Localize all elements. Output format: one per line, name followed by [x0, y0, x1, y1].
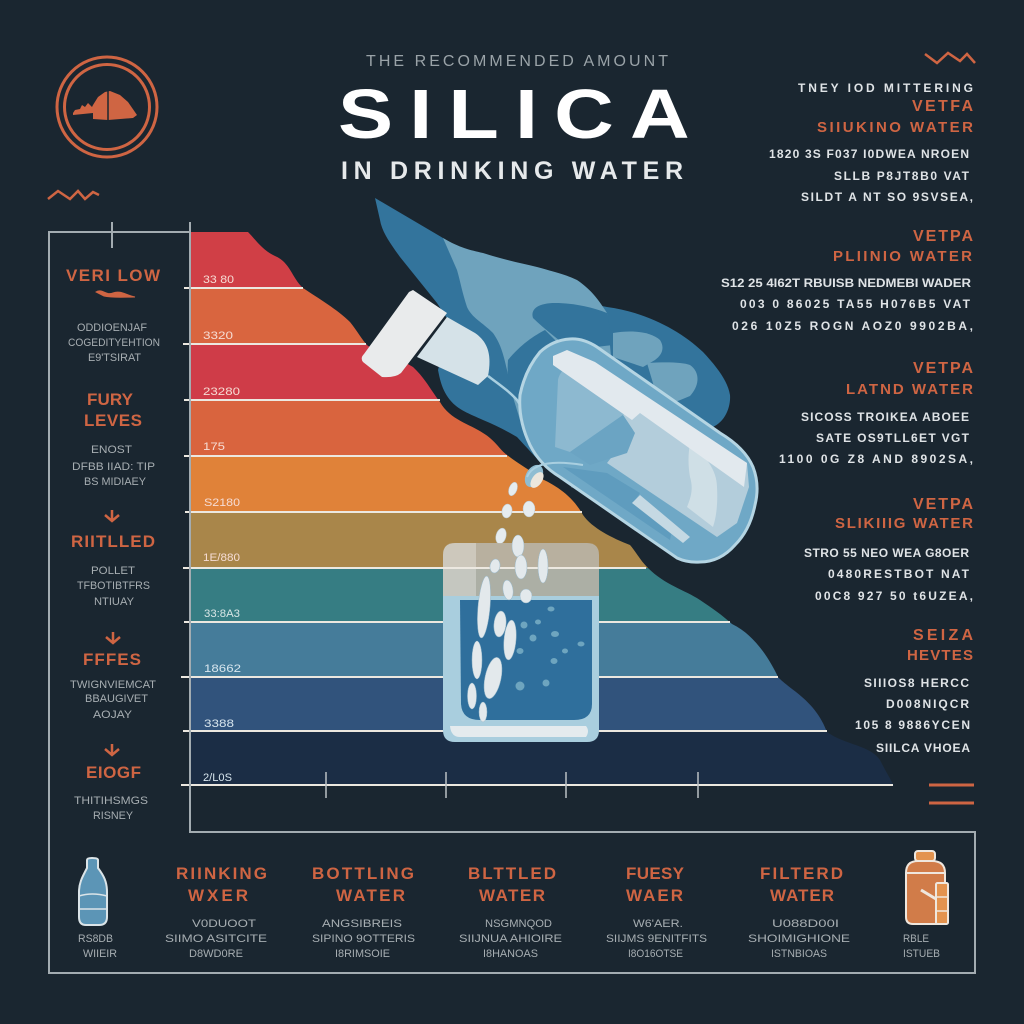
- arrow: down 1: [105, 510, 119, 521]
- chart: stepped silica level bands: [181, 232, 910, 832]
- level: fury levels: DFBB IIAD: TIP: [72, 461, 155, 473]
- chart value labels: S2180: [204, 497, 240, 509]
- level: fury levels: LEVES: [84, 411, 142, 430]
- caption: right icon: ISTUEB: [903, 948, 940, 960]
- level: ffes: AOJAY: [93, 709, 133, 721]
- caption: right icon: RBLE: [903, 933, 929, 945]
- arrow: down 2: [106, 632, 120, 643]
- type: rinking water: WXER: [188, 886, 248, 905]
- level: rittled: POLLET: [91, 565, 135, 577]
- block: silking water: VETFA: [912, 98, 973, 115]
- block: silking water: TNEY IOD MITTERING: [798, 81, 973, 95]
- chart frame: [49, 222, 975, 973]
- bottle cap: [362, 290, 447, 377]
- panel: right column text: [721, 81, 974, 803]
- caption: left icon: WIIEIR: [83, 948, 117, 960]
- chart value labels: [203, 274, 241, 784]
- icon: left zigzag: [48, 191, 99, 199]
- block: plinio water: 003 0 86025 TA55 H076B5 VAT: [740, 297, 971, 311]
- level: fury levels: [72, 390, 155, 488]
- block: seiza hevtes: SIILCA VHOEA: [876, 741, 970, 755]
- type: filterd water: ISTNBIOAS: [771, 948, 827, 960]
- illustration: pills falling from the bottle: [494, 481, 535, 545]
- level: very low: [66, 266, 161, 364]
- block: silking water: SLLB P8JT8B0 VAT: [834, 169, 970, 183]
- caption: left icon: RS8DB: [78, 933, 113, 945]
- chart value labels: 23280: [203, 386, 240, 398]
- type: blttled water: [459, 864, 562, 960]
- level: rittled: TFBOTIBTFRS: [77, 580, 150, 592]
- type: rinking water: D8WD0RE: [189, 948, 243, 960]
- block: silking water: 1820 3S F037 I0DWEA NROEN: [769, 147, 969, 161]
- block: slikiig water: STRO 55 NEO WEA G8OER: [804, 546, 969, 560]
- type: fuesy water: W6'AER.: [633, 918, 683, 930]
- icon: water bottle: [79, 858, 107, 925]
- type: blttled water: BLTTLED: [468, 864, 556, 883]
- title: [338, 53, 690, 185]
- chart value labels: 175: [203, 441, 225, 453]
- block: silking water: SILDT A NT SO 9SVSEA,: [801, 190, 973, 204]
- level: rittled: [71, 532, 155, 608]
- type: blttled water: I8HANOAS: [483, 948, 538, 960]
- level: very low: E9'TSIRAT: [88, 352, 141, 364]
- chart value labels: 1E/880: [203, 552, 240, 564]
- type: fuesy water: SIIJMS 9ENITFITS: [606, 933, 707, 945]
- block: slikiig water: SLIKIIIG WATER: [835, 515, 973, 532]
- decorative orange bars: [929, 785, 974, 803]
- block: plinio water: VETPA: [913, 228, 973, 245]
- block: latnd water: SICOSS TROIKEA ABOEE: [801, 410, 969, 424]
- type: fuesy water: I8O16OTSE: [628, 948, 683, 960]
- chart value labels: 3388: [204, 718, 234, 730]
- level: eiogf: EIOGF: [86, 763, 141, 782]
- panel: left level labels: [66, 266, 161, 822]
- type: fuesy water: [606, 864, 707, 960]
- bubbles in water: [516, 606, 584, 690]
- type: blttled water: WATER: [479, 886, 545, 905]
- chart value labels: 3320: [203, 330, 233, 342]
- type: blttled water: SIIJNUA AHIOIRE: [459, 933, 562, 945]
- type: bottling water: [312, 864, 415, 960]
- type: blttled water: NSGMNQOD: [485, 918, 552, 930]
- block: seiza hevtes: HEVTES: [907, 647, 973, 664]
- type: rinking water: RIINKING: [176, 864, 267, 883]
- arrow: down 3: [105, 744, 119, 755]
- level: ffes: TWIGNVIEMCAT: [70, 679, 156, 691]
- level: fury levels: FURY: [87, 390, 134, 409]
- type: fuesy water: WAER: [626, 886, 683, 905]
- type: filterd water: [748, 864, 850, 960]
- level: fury levels: BS MIDIAEY: [84, 476, 147, 488]
- type: bottling water: BOTTLING: [312, 864, 414, 883]
- block: slikiig water: [804, 496, 973, 603]
- block: seiza hevtes: SIIIOS8 HERCC: [864, 676, 969, 690]
- chart value labels: 2/L0S: [203, 772, 232, 784]
- block: silking water: SIIUKINO WATER: [817, 119, 973, 136]
- type: rinking water: [165, 864, 267, 960]
- title: THE RECOMMENDED AMOUNT: [366, 53, 668, 70]
- level: ffes: FFFES: [83, 650, 141, 669]
- caption: left icon: [78, 933, 117, 960]
- level: ffes: BBAUGIVET: [85, 693, 148, 705]
- level: eiogf: THITIHSMGS: [74, 795, 148, 807]
- type: filterd water: FILTERD: [760, 864, 843, 883]
- illustration: tilted bottle with cap: [362, 290, 757, 562]
- level: ffes: [70, 650, 156, 721]
- block: slikiig water: 00C8 927 50 t6UZEA,: [815, 589, 973, 603]
- title: SILICA: [338, 76, 690, 154]
- pills in glass: [468, 535, 548, 722]
- block: seiza hevtes: 105 8 9886YCEN: [855, 718, 970, 732]
- panel: bottom water types: [78, 851, 948, 960]
- type: rinking water: V0DUOOT: [192, 918, 256, 930]
- block: latnd water: SATE OS9TLL6ET VGT: [816, 431, 970, 445]
- type: filterd water: WATER: [770, 886, 834, 905]
- logo: circular emblem: [57, 57, 157, 157]
- chart value labels: 33 80: [203, 274, 234, 286]
- block: slikiig water: VETPA: [913, 496, 973, 513]
- block: plinio water: PLIINIO WATER: [833, 248, 972, 265]
- type: fuesy water: FUESY: [626, 864, 685, 883]
- block: plinio water: S12 25 4I62T RBUISB NEDMEBI WADER: [721, 276, 971, 290]
- type: bottling water: ANGSIBREIS: [322, 918, 402, 930]
- block: latnd water: LATND WATER: [846, 381, 973, 398]
- block: plinio water: [721, 228, 973, 333]
- bottle nozzle: [521, 462, 583, 490]
- chart value labels: 33:8A3: [204, 608, 240, 620]
- level: very low: ODDIOENJAF: [77, 322, 147, 334]
- type: bottling water: SIPINO 9OTTERIS: [312, 933, 415, 945]
- block: seiza hevtes: SEIZA: [913, 627, 973, 644]
- block: latnd water: [779, 360, 973, 466]
- bottle spout stroke: [488, 376, 573, 487]
- title: IN DRINKING WATER: [341, 157, 683, 185]
- block: plinio water: 026 10Z5 ROGN AOZ0 9902BA,: [732, 319, 973, 333]
- level: fury levels: ENOST: [91, 444, 132, 456]
- block: latnd water: 1100 0G Z8 AND 8902SA,: [779, 452, 973, 466]
- level: very low: COGEDITYEHTION: [68, 337, 160, 349]
- level: rittled: NTIUAY: [94, 596, 135, 608]
- illustration: blue splash behind bottle: [375, 198, 730, 480]
- type: rinking water: SIIMO ASITCITE: [165, 933, 267, 945]
- block: seiza hevtes: D008NIQCR: [886, 697, 969, 711]
- type: filterd water: U088D00I: [772, 918, 839, 930]
- level: very low: VERI LOW: [66, 266, 161, 285]
- block: silking water: [769, 81, 973, 204]
- level: eiogf: [74, 763, 148, 822]
- bottle neck: [417, 317, 489, 385]
- chart value labels: 18662: [204, 663, 241, 675]
- icon: right zigzag: [925, 53, 975, 63]
- type: bottling water: WATER: [336, 886, 405, 905]
- bottle body: [520, 339, 757, 562]
- level: eiogf: RISNEY: [93, 810, 134, 822]
- block: seiza hevtes: [855, 627, 973, 755]
- block: slikiig water: 0480RESTBOT NAT: [828, 567, 970, 581]
- illustration: glass of water: [443, 535, 599, 742]
- level: rittled: RIITLLED: [71, 532, 155, 551]
- type: filterd water: SHOIMIGHIONE: [748, 933, 850, 945]
- caption: right icon: [903, 933, 940, 960]
- icon: filter jug: [906, 851, 948, 924]
- type: bottling water: I8RIMSOIE: [335, 948, 390, 960]
- block: latnd water: VETPA: [913, 360, 973, 377]
